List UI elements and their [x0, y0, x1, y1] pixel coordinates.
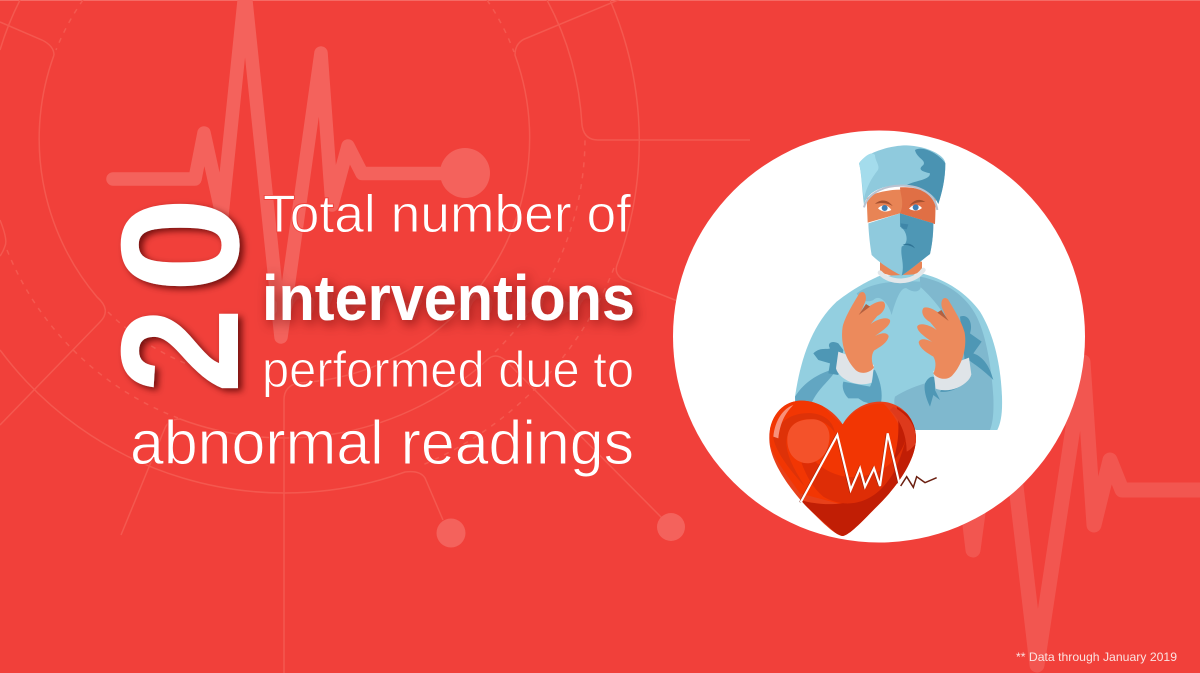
- connector dot right: [657, 513, 685, 541]
- big number 20: [87, 197, 274, 394]
- surgeon mask: [868, 213, 933, 276]
- surgeon collar: [880, 270, 923, 281]
- surgeon gown: [790, 270, 1007, 430]
- big number 20: 0: [87, 197, 274, 293]
- surgeon face: [867, 187, 936, 224]
- heading text block: [130, 185, 635, 478]
- footnote: ** Data through January 2019: [1016, 650, 1177, 664]
- line: abnormal readings: abnormal readings: [130, 409, 634, 478]
- background circuit rings: [0, 0, 750, 673]
- white circle: [673, 130, 1085, 542]
- surgeon neck: [880, 262, 922, 278]
- line: performed due to: performed due to: [262, 341, 634, 398]
- ecg line lower right: [955, 350, 1200, 665]
- surgeon cap: [859, 145, 945, 210]
- connector dot left: [436, 518, 466, 548]
- icon: heart with pulse: [763, 397, 937, 540]
- line: Total number of: Total number of: [263, 185, 631, 244]
- surgeon left hand: [836, 292, 890, 384]
- ecg line upper left: [113, 0, 490, 337]
- pulse line: [800, 433, 937, 502]
- heart body: [769, 400, 916, 536]
- big number 20: 2: [87, 308, 274, 394]
- line: interventions: interventions: [262, 262, 635, 334]
- icon: surgeon: [790, 145, 1007, 430]
- surgeon right hand: [917, 298, 971, 390]
